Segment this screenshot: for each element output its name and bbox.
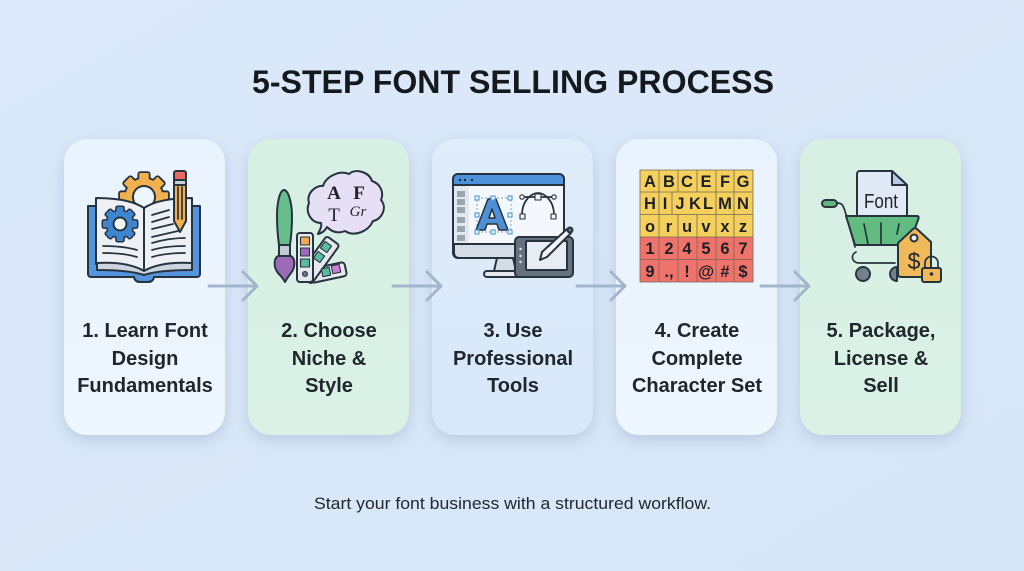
step 4 label: 4. Create xyxy=(655,320,739,342)
step 3 label: 3. Use xyxy=(484,320,542,342)
panel: step 3: Professional xyxy=(453,348,573,370)
arrow: step 2 to 3 xyxy=(393,272,441,300)
icon: character grid: 2 xyxy=(664,240,674,258)
icon: character grid: N xyxy=(737,195,749,213)
icon: character grid: u xyxy=(682,218,692,236)
panel: step 2 xyxy=(248,139,409,435)
arrow: step 1 to 2 xyxy=(209,272,257,300)
panel: step 5: License & xyxy=(834,348,928,370)
icon: shopping cart, font file, price tag and lock: $ xyxy=(908,248,921,274)
panel: step 5: Sell xyxy=(863,375,899,397)
icon: character grid: I xyxy=(663,195,667,213)
icon: character grid: x xyxy=(720,218,730,236)
panel: step 5 xyxy=(800,139,961,435)
arrow: step 3 to 4 xyxy=(577,272,625,300)
icon: shopping cart, font file, price tag and lock: Font xyxy=(864,191,898,213)
icon: character grid: G xyxy=(737,173,749,191)
icon: monitor, glyph editor and drawing tablet xyxy=(453,174,573,277)
panel: step 1: Design xyxy=(112,348,178,370)
icon: character grid xyxy=(640,170,753,282)
title: 5-STEP FONT SELLING PROCESS xyxy=(252,64,774,100)
icon: character grid: K xyxy=(689,195,701,213)
icon: open book with gear and pencil xyxy=(88,171,200,282)
icon: character grid: z xyxy=(739,218,747,236)
icon: character grid: r xyxy=(666,218,673,236)
panel: step 2: Style xyxy=(305,375,353,397)
icon: character grid: # xyxy=(720,263,730,281)
icon: character grid: 1 xyxy=(645,240,655,258)
icon: character grid: 4 xyxy=(682,240,692,258)
icon: brush, speech bubble and swatches: T xyxy=(328,205,340,226)
panel: step 4: Character Set xyxy=(632,375,762,397)
step 2 label: 2. Choose xyxy=(281,320,377,342)
icon: brush, speech bubble and swatches xyxy=(275,171,384,284)
icon: brush, speech bubble and swatches: A xyxy=(327,183,341,204)
panel: step 1: Fundamentals xyxy=(77,375,213,397)
icon: character grid: L xyxy=(703,195,713,213)
icon: character grid: F xyxy=(720,173,730,191)
icon: character grid: E xyxy=(700,173,712,191)
icon: character grid: o xyxy=(645,218,655,236)
icon: character grid: v xyxy=(701,218,711,236)
panel: step 3 xyxy=(432,139,593,435)
step 1 label: 1. Learn Font xyxy=(82,320,208,342)
icon: brush, speech bubble and swatches: F xyxy=(353,183,365,204)
icon: character grid: M xyxy=(718,195,732,213)
icon: character grid: B xyxy=(663,173,675,191)
icon: character grid: @ xyxy=(698,263,714,281)
icon: character grid: C xyxy=(681,173,693,191)
icon: character grid: 5 xyxy=(701,240,711,258)
panel: step 3: Tools xyxy=(487,375,539,397)
footer caption: Start your font business with a structured workflow. xyxy=(314,495,711,513)
step 5 label: 5. Package, xyxy=(827,320,935,342)
icon: character grid: 9 xyxy=(645,263,655,281)
icon: character grid: ! xyxy=(684,263,690,281)
icon: character grid: H xyxy=(644,195,656,213)
panel: step 4 xyxy=(616,139,777,435)
panel: step 4: Complete xyxy=(651,348,743,370)
icon: character grid: 6 xyxy=(720,240,730,258)
icon: character grid: $ xyxy=(738,263,748,281)
icon: character grid: A xyxy=(644,173,656,191)
panel: step 1 xyxy=(64,139,225,435)
icon: character grid: ., xyxy=(664,263,674,281)
arrow: step 4 to 5 xyxy=(761,272,809,300)
icon: brush, speech bubble and swatches: Gr xyxy=(350,204,366,220)
panel: step 2: Niche & xyxy=(292,348,366,370)
icon: character grid: 7 xyxy=(738,240,748,258)
icon: character grid: J xyxy=(675,195,685,213)
icon: shopping cart, font file, price tag and lock xyxy=(822,171,941,282)
